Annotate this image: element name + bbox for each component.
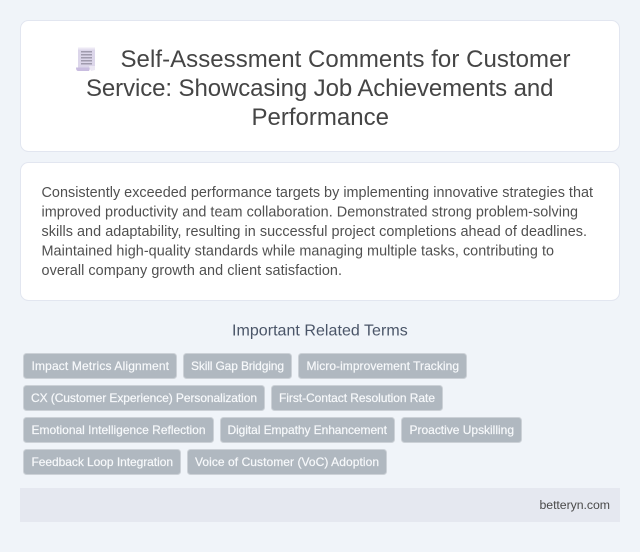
tag: proactive upskilling: Proactive Upskilling xyxy=(410,423,514,437)
tag: first-contact resolution rate: First-Contact Resolution Rate xyxy=(279,391,435,405)
description text: Maintained high-quality standards while managing multiple tasks, contributing to xyxy=(42,244,554,260)
description text: improved productivity and team collaboration. Demonstrated strong problem-solving xyxy=(42,204,578,220)
panel: title card xyxy=(20,20,620,152)
tag: impact metrics alignment: Impact Metrics Alignment xyxy=(32,359,170,373)
description text: overall company growth and client satisfaction. xyxy=(42,263,342,279)
icon: document scroll xyxy=(76,48,95,71)
tag: digital empathy enhancement xyxy=(220,418,394,442)
tag: micro-improvement tracking xyxy=(298,354,466,378)
tag: emotional intelligence reflection: Emotional Intelligence Reflection xyxy=(32,423,206,437)
tag: cx personalization xyxy=(24,386,264,410)
footer: site name: betteryn.com xyxy=(540,498,610,512)
tag: impact metrics alignment xyxy=(24,354,176,378)
tag: first-contact resolution rate xyxy=(272,386,442,410)
tag: voice of customer adoption xyxy=(188,450,386,474)
tag: micro-improvement tracking: Micro-improvement Tracking xyxy=(306,359,459,373)
title: Service: Showcasing Job Achievements and xyxy=(86,75,554,102)
tag list xyxy=(24,354,522,474)
heading: important related terms: Important Related Terms xyxy=(232,322,408,340)
description text: Consistently exceeded performance targets by implementing innovative strategies that xyxy=(42,185,593,201)
tag: cx personalization: CX (Customer Experience) Personalization xyxy=(31,391,257,405)
panel: description card xyxy=(20,162,620,300)
tag: emotional intelligence reflection xyxy=(24,418,214,442)
tag: feedback loop integration: Feedback Loop Integration xyxy=(32,455,173,469)
tag: feedback loop integration xyxy=(24,450,180,474)
title xyxy=(86,46,570,131)
description text: skills and adaptability, resulting in successful project completions ahead of deadlines. xyxy=(42,224,587,240)
title: Performance xyxy=(252,104,389,131)
tag: proactive upskilling xyxy=(402,418,522,442)
tag: digital empathy enhancement: Digital Empathy Enhancement xyxy=(228,423,388,437)
tag: skill gap bridging xyxy=(184,354,292,378)
tag: skill gap bridging: Skill Gap Bridging xyxy=(191,359,284,373)
description text xyxy=(42,185,593,279)
footer bar xyxy=(20,488,620,522)
title: Self-Assessment Comments for Customer xyxy=(120,46,570,73)
tag: voice of customer adoption: Voice of Customer (VoC) Adoption xyxy=(195,455,379,469)
